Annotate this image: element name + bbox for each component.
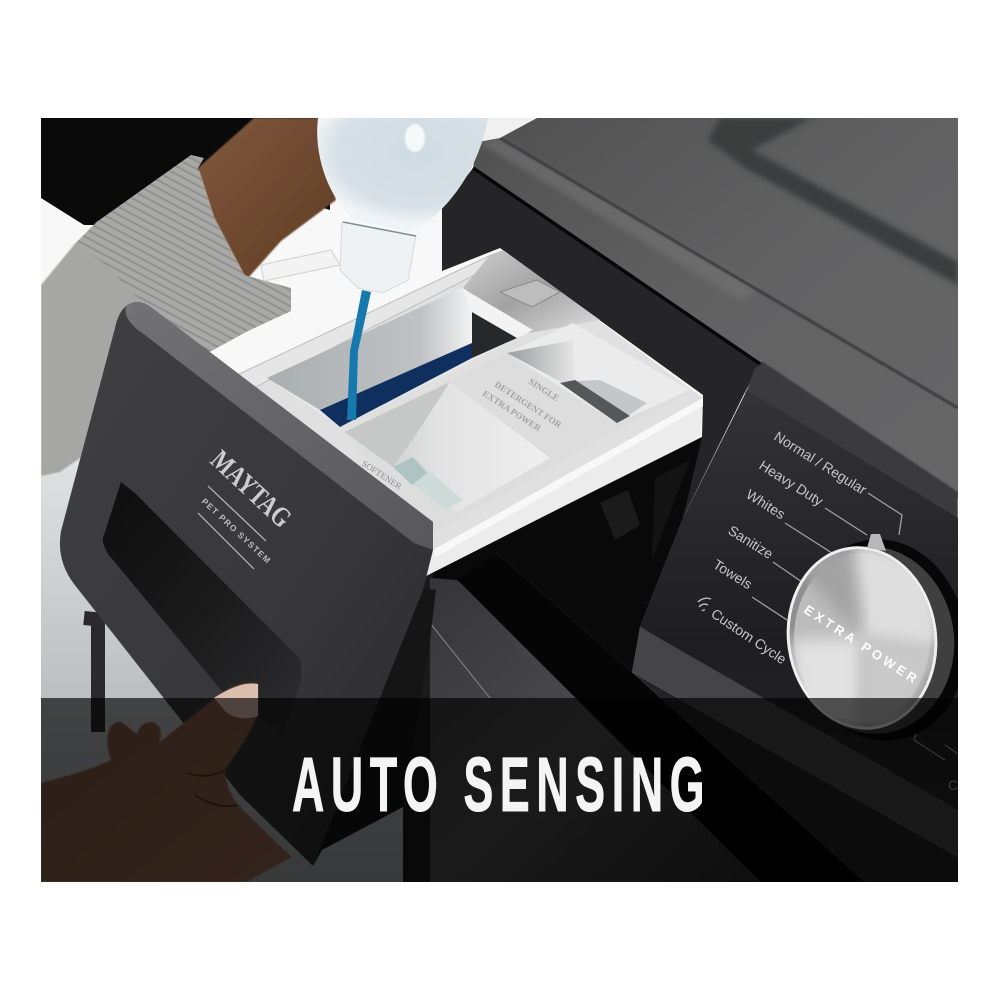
infographic canvas (41, 118, 958, 882)
room background (41, 118, 403, 882)
softener label: SOFTENER (360, 458, 404, 491)
cycle labels: Sanitize (725, 522, 776, 562)
detergent drawer tray (233, 250, 703, 578)
drawer release button (500, 280, 560, 307)
opening under drawer (422, 437, 702, 672)
dial (786, 534, 958, 740)
lower front panel (403, 553, 958, 882)
cycle labels (708, 428, 870, 667)
title: AUTO SENSING (292, 742, 711, 828)
dark caption band (41, 698, 958, 882)
center plate (343, 323, 690, 535)
cycle labels: Whites (743, 486, 788, 522)
right cavity (507, 323, 690, 423)
blue detergent stream (347, 290, 371, 420)
bottle (261, 118, 488, 293)
brand logo: MAYTAG (204, 444, 298, 534)
bottle handle tab (261, 250, 340, 281)
embossed detergent text: DETERGENT FOR (493, 379, 564, 430)
drawer door (60, 302, 433, 866)
cycle labels: Custom Cycle (708, 605, 790, 667)
cycle labels: Normal / Regular (771, 428, 870, 498)
softener cavity (345, 382, 550, 512)
sweater sleeve (41, 150, 300, 476)
dial brushed face (790, 550, 934, 726)
lower hand (41, 683, 292, 882)
main wash cavity (267, 288, 533, 427)
photo: washer dispenser drawer (41, 118, 979, 882)
icon: wifi (698, 598, 711, 611)
underside of door (313, 588, 436, 866)
embossed detergent text: EXTRA POWER (481, 388, 543, 434)
fingernail (214, 684, 258, 718)
washer front and pillar (442, 168, 763, 672)
dial text: EXTRA POWER (801, 602, 923, 688)
embossed detergent text: SINGLE (527, 376, 561, 403)
machine top (473, 118, 958, 522)
logo rules and subtitle: PET PRO SYSTEM (200, 496, 273, 566)
upper hand holding bottle (198, 118, 336, 278)
cycle labels: Heavy Duty (756, 457, 826, 509)
door handle recess (102, 482, 301, 698)
bottle cap (340, 222, 416, 293)
cycle labels: Towels (710, 556, 755, 592)
control panel (640, 390, 958, 810)
control panel: C (948, 777, 958, 793)
label leader lines (752, 493, 902, 620)
